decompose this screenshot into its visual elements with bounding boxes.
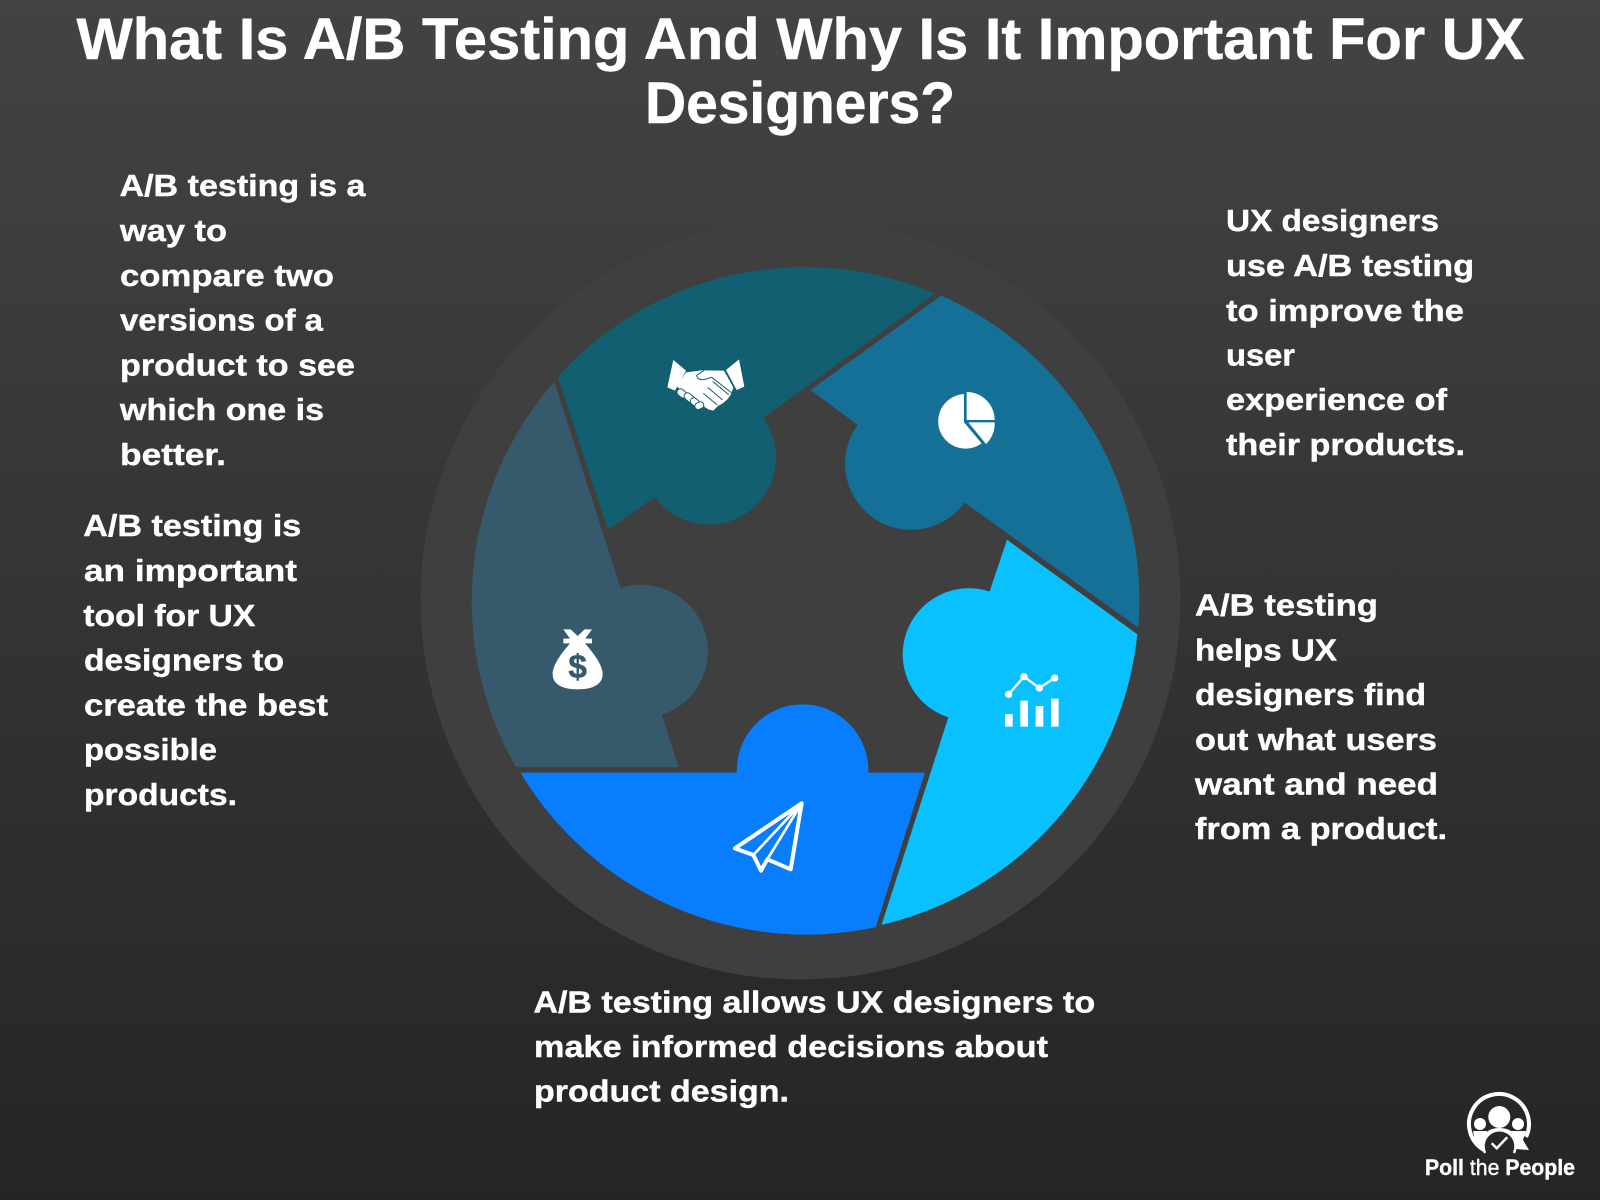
segment: bright blue paper plane [520, 704, 925, 935]
text block: important tool: tool for UX [83, 598, 256, 633]
logo wordmark: Poll the People [1425, 1155, 1575, 1180]
text block: important tool: products. [84, 777, 237, 812]
text block: improve user experience: user [1226, 338, 1295, 372]
text block: improve user experience: UX designers [1226, 203, 1439, 238]
text block: what A/B testing is: way to [119, 213, 227, 248]
title: What Is A/B Testing And Why Is It Important For UX [76, 7, 1525, 72]
segment: blue pie chart [810, 296, 1139, 628]
text block: informed decisions: make informed decisions about [534, 1029, 1048, 1064]
text block: what users want: designers find [1195, 677, 1426, 712]
text block: what users want: out what users [1195, 722, 1437, 757]
segment: cyan analytics [882, 540, 1137, 925]
text block: what users want: helps UX [1195, 632, 1337, 668]
segment: teal handshake [558, 267, 935, 530]
text block: important tool: create the best [84, 688, 328, 722]
logo: Poll the People [1425, 1094, 1575, 1180]
text block: informed decisions: product design. [534, 1074, 789, 1109]
text block: what A/B testing is: A/B testing is a [120, 168, 366, 203]
text block: important tool: designers to [84, 642, 284, 678]
text block: important tool [83, 508, 328, 812]
text block: what A/B testing is: product to see [120, 348, 355, 382]
logo mark [1469, 1094, 1529, 1162]
text block: what A/B testing is: better. [120, 437, 226, 472]
text block: what A/B testing is [119, 168, 366, 472]
text block: what users want: want and need [1194, 766, 1438, 802]
text block: informed decisions [533, 984, 1095, 1109]
icon: money bag [553, 629, 603, 689]
text block: improve user experience: to improve the [1226, 293, 1464, 328]
text block: important tool: A/B testing is [83, 508, 301, 543]
text block: what users want [1194, 588, 1447, 846]
text block: improve user experience: experience of [1226, 382, 1448, 417]
text block: what users want: from a product. [1195, 811, 1447, 846]
title [76, 7, 1525, 136]
icon: paper plane [735, 803, 802, 871]
text block: improve user experience [1226, 203, 1474, 462]
icon: pie chart [938, 392, 995, 449]
text block: improve user experience: use A/B testing [1226, 248, 1474, 283]
icon: money bag: $ [568, 649, 587, 686]
circular diagram backdrop [420, 220, 1180, 980]
text block: what A/B testing is: compare two [120, 258, 334, 293]
icon: handshake [667, 359, 744, 411]
text block: what A/B testing is: versions of a [120, 302, 324, 338]
text block: what A/B testing is: which one is [119, 392, 324, 427]
text block: important tool: possible [84, 732, 217, 767]
text block: what users want: A/B testing [1195, 588, 1378, 623]
title: Designers? [645, 71, 955, 136]
text block: informed decisions: A/B testing allows UX designers to [533, 984, 1095, 1019]
text block: improve user experience: their products. [1226, 427, 1465, 462]
icon: analytics chart [1005, 673, 1059, 727]
text block: important tool: an important [84, 553, 297, 588]
segment: slate money bag [472, 382, 708, 767]
